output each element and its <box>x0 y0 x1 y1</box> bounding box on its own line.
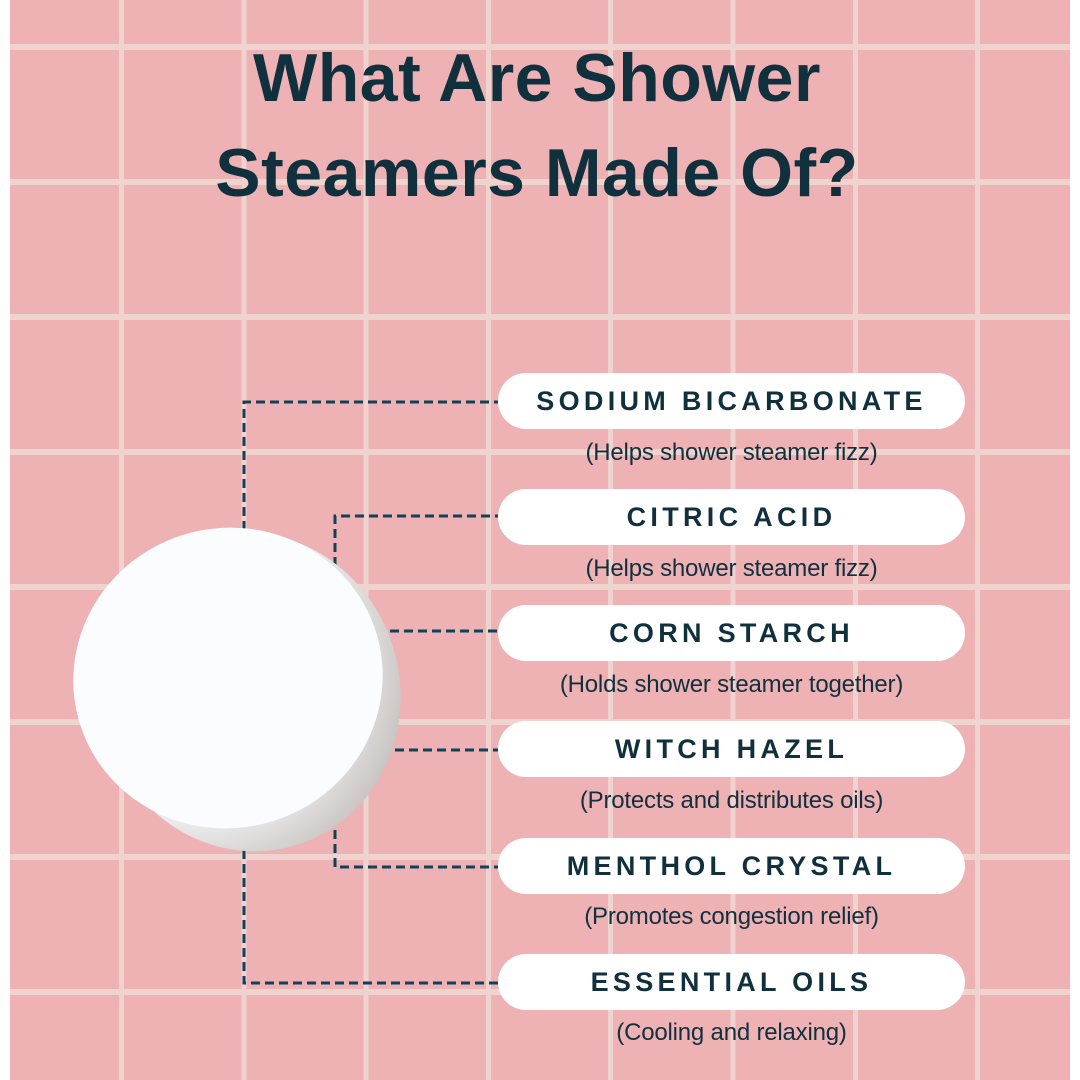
title: Steamers Made Of? <box>215 135 859 211</box>
item: essential oils <box>498 954 965 1046</box>
text: (Holds shower steamer together) <box>560 671 903 698</box>
title <box>215 40 859 211</box>
steamer illustration <box>73 528 401 852</box>
text: CORN STARCH <box>609 618 854 648</box>
text: (Helps shower steamer fizz) <box>585 439 878 466</box>
text: MENTHOL CRYSTAL <box>567 851 896 881</box>
text: WITCH HAZEL <box>615 734 848 764</box>
item: corn starch <box>498 605 965 698</box>
item: menthol crystal <box>498 838 965 930</box>
text: (Protects and distributes oils) <box>580 787 883 814</box>
text: ESSENTIAL OILS <box>591 967 872 997</box>
item: witch hazel <box>498 721 965 814</box>
text: (Helps shower steamer fizz) <box>585 555 878 582</box>
text: SODIUM BICARBONATE <box>536 386 927 416</box>
title: What Are Shower <box>253 40 821 116</box>
text: (Promotes congestion relief) <box>584 903 879 930</box>
text: CITRIC ACID <box>627 502 836 532</box>
item: citric acid <box>498 489 965 582</box>
item: sodium bicarbonate <box>498 373 965 466</box>
text: (Cooling and relaxing) <box>616 1019 847 1046</box>
